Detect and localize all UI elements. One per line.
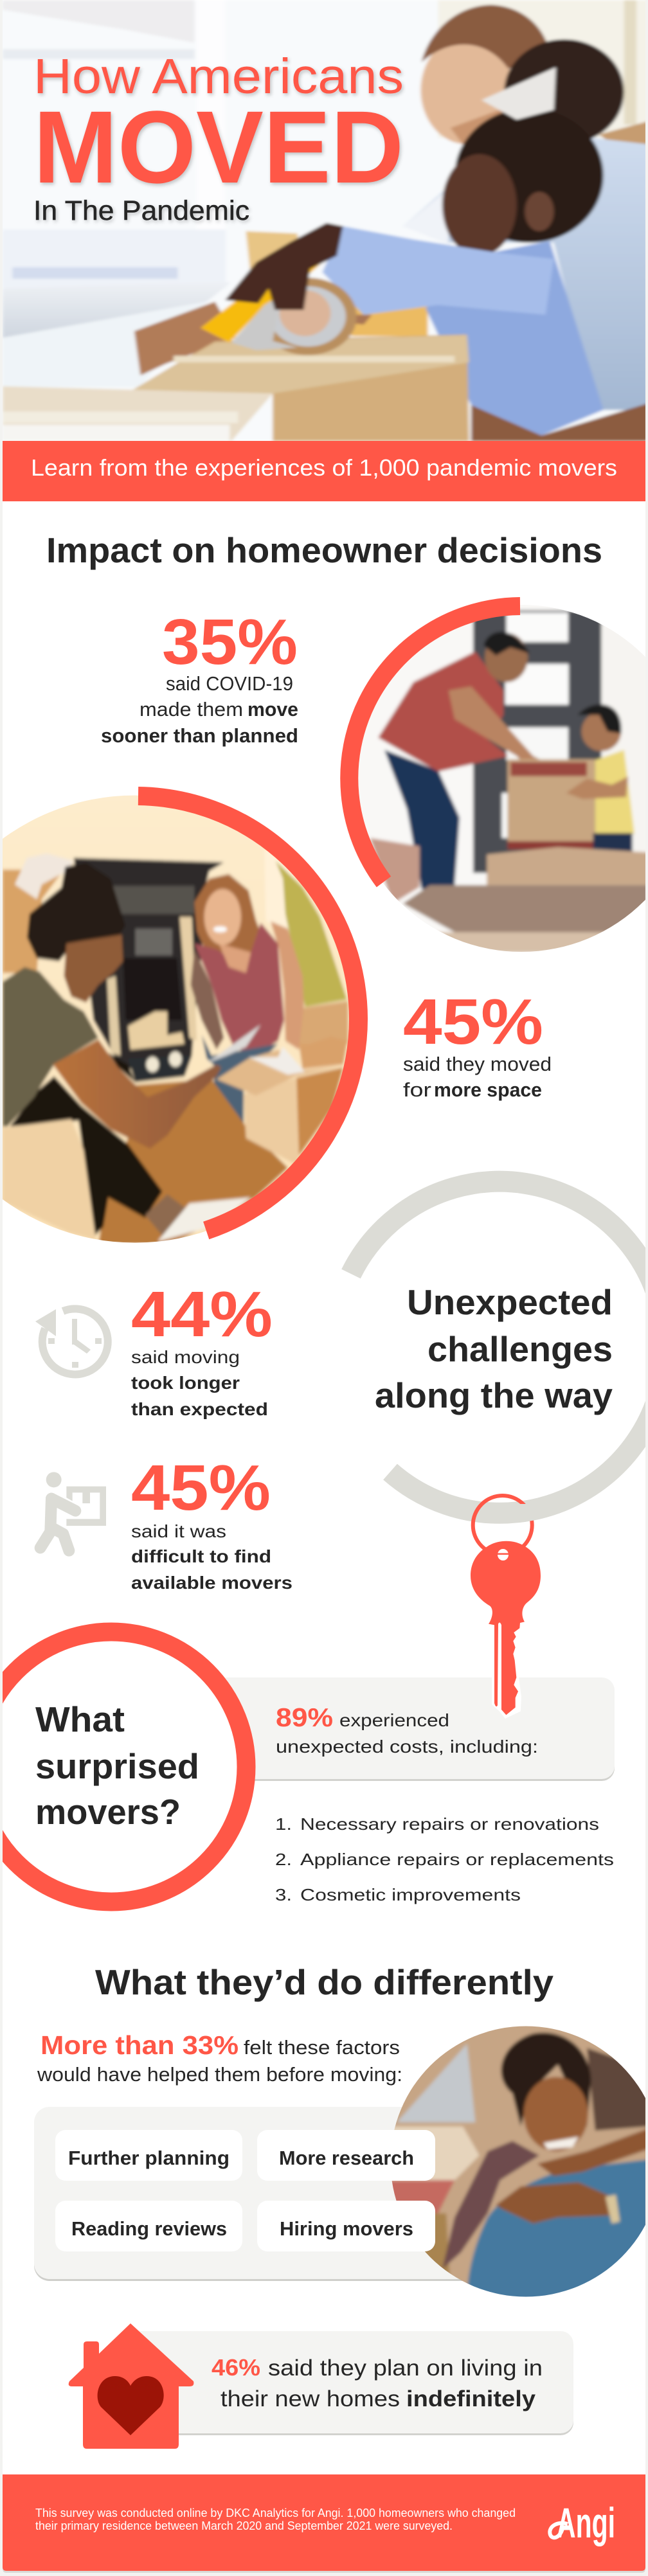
heading: unexpected challenges: along the way xyxy=(375,1375,613,1415)
stat: 35% xyxy=(101,606,298,747)
pill: reading reviews: Reading reviews xyxy=(71,2217,227,2240)
list: unexpected costs: Appliance repairs or replacements xyxy=(300,1850,614,1869)
stat: 45% movers: available movers xyxy=(131,1573,292,1593)
title: How Americans xyxy=(33,49,404,104)
pill: further planning xyxy=(55,2130,242,2181)
near box xyxy=(299,1037,347,1069)
heading: unexpected challenges: Unexpected xyxy=(407,1282,613,1322)
icon: person carrying box xyxy=(40,1472,106,1551)
heading: impact on homeowner decisions: Impact on homeowner decisions xyxy=(46,530,602,570)
tape dispenser xyxy=(259,278,357,355)
stat: 35%: 35% xyxy=(162,606,298,678)
grey ring xyxy=(351,1181,648,1513)
list: unexpected costs: Cosmetic improvements xyxy=(300,1885,521,1904)
panel: 46% living indefinitely: their new homes xyxy=(221,2386,400,2411)
stat: 45% more space: more space xyxy=(434,1078,542,1101)
floor xyxy=(98,1079,288,1244)
stat: 45% movers: said it was xyxy=(131,1521,226,1541)
title: MOVED xyxy=(33,89,404,204)
photo: couple hugging with keys xyxy=(384,2019,648,2304)
list: unexpected costs xyxy=(275,1814,614,1904)
footer: their primary residence between March 2020 and September 2021 were surveyed. xyxy=(35,2519,453,2532)
photo: man and boy with moving box xyxy=(359,605,645,952)
hero photo: mother and child taping a box xyxy=(0,0,648,441)
heading: what surprised movers: What xyxy=(35,1699,125,1739)
list: unexpected costs: 1. xyxy=(275,1814,292,1834)
pill: hiring movers xyxy=(257,2201,435,2251)
stat: 44% took longer: took longer xyxy=(131,1373,240,1393)
child face xyxy=(442,154,517,256)
stat: 35%: made them xyxy=(140,698,243,720)
stat: 35%: move xyxy=(248,698,298,720)
footer: This survey was conducted online by DKC Analytics for Angi. 1,000 homeowners who changed xyxy=(35,2507,516,2519)
panel: unexpected costs xyxy=(212,1677,615,1781)
stat: 44% took longer: than expected xyxy=(131,1399,268,1419)
pill: further planning: Further planning xyxy=(68,2147,230,2169)
intro: more than 33%: felt these factors xyxy=(244,2036,400,2059)
right woman xyxy=(271,922,304,1050)
heading: unexpected challenges xyxy=(375,1282,613,1415)
banner xyxy=(3,441,645,501)
intro: more than 33%: would have helped them before moving: xyxy=(37,2063,402,2086)
pill: hiring movers: Hiring movers xyxy=(280,2217,413,2240)
title xyxy=(33,49,404,226)
stat: 44% took longer: 44% xyxy=(131,1278,273,1350)
list: unexpected costs: 2. xyxy=(275,1850,292,1869)
child's hand xyxy=(225,223,343,310)
intro: more than 33% xyxy=(37,2030,402,2086)
panel: unexpected costs: experienced xyxy=(339,1710,449,1730)
woman's hand xyxy=(134,301,235,375)
icon: house with heart xyxy=(69,2323,194,2449)
heading: what they'd do differently: What they’d do differently xyxy=(95,1962,554,2002)
stat: 45% movers: 45% xyxy=(131,1452,271,1524)
footer xyxy=(3,2474,645,2573)
child hair xyxy=(504,39,624,144)
list: unexpected costs: Necessary repairs or renovations xyxy=(300,1814,599,1834)
stat: 45% movers xyxy=(131,1452,292,1593)
banner: Learn from the experiences of 1,000 pandemic movers xyxy=(31,454,617,481)
icon: clock with arrow xyxy=(35,1309,108,1374)
panel: unexpected costs: 89% xyxy=(276,1703,333,1732)
stat: 44% took longer xyxy=(131,1278,273,1419)
heading: unexpected challenges: challenges xyxy=(428,1329,613,1369)
stat: 45% more space: for xyxy=(403,1078,431,1101)
left woman xyxy=(15,854,74,899)
stat: 45% more space: said they moved xyxy=(403,1053,552,1075)
heading: what surprised movers xyxy=(35,1699,199,1832)
photo: two women unpacking by fireplace xyxy=(3,796,349,1243)
ring: what surprised movers xyxy=(0,1632,246,1902)
arc: red ring around women photo xyxy=(138,796,358,1230)
pill: more research xyxy=(257,2130,435,2181)
stat: 44% took longer: said moving xyxy=(131,1347,240,1367)
panel: unexpected costs: unexpected costs, including: xyxy=(276,1737,538,1757)
stat: 45% movers: difficult to find xyxy=(131,1546,271,1566)
lower mother arm xyxy=(471,404,648,441)
boxes xyxy=(132,334,469,441)
stat: 45% more space: 45% xyxy=(403,986,543,1058)
panel: 46% living indefinitely: indefinitely xyxy=(406,2386,536,2411)
stat: 45% more space xyxy=(403,986,552,1101)
list: unexpected costs: 3. xyxy=(275,1885,292,1904)
heading: what surprised movers: movers? xyxy=(35,1792,181,1832)
child shirt xyxy=(426,241,604,436)
arc: red ring around man photo xyxy=(349,606,520,882)
heading: what surprised movers: surprised xyxy=(35,1746,199,1786)
panel: 46% living indefinitely: said they plan on living in xyxy=(268,2356,543,2381)
stat: 35%: sooner than planned xyxy=(101,724,298,747)
icon: key on ring xyxy=(471,1494,541,1719)
mother xyxy=(403,138,648,410)
pill: more research: More research xyxy=(279,2147,414,2169)
panel: 46% living indefinitely: 46% xyxy=(212,2354,260,2381)
pill: reading reviews xyxy=(55,2201,242,2251)
panel: helpful factors background xyxy=(34,2107,497,2281)
stat: 35%: said COVID-19 xyxy=(166,672,293,695)
intro: more than 33%: More than 33% xyxy=(40,2030,239,2060)
panel: 46% living indefinitely xyxy=(129,2331,573,2435)
title: In The Pandemic xyxy=(33,195,249,226)
